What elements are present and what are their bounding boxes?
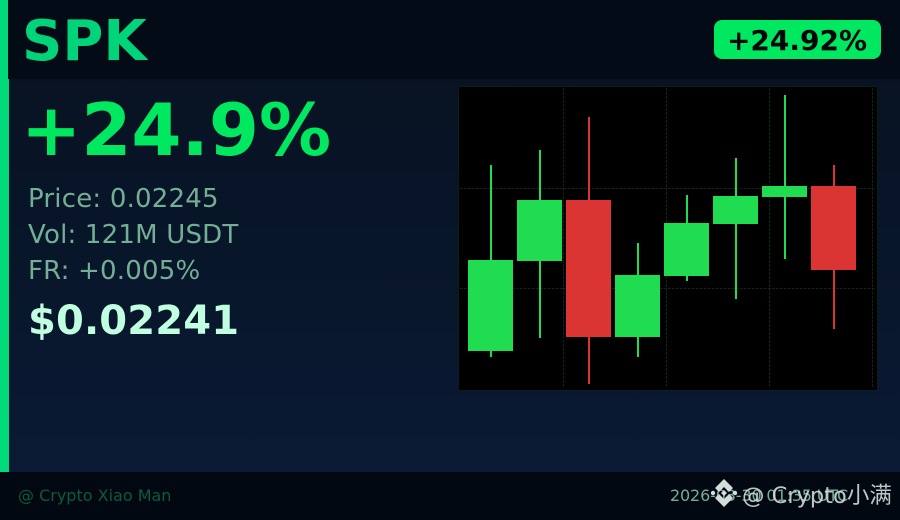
watermark [711,478,892,510]
candle 3 [566,117,611,384]
current price: $0.02241 [28,298,239,344]
left accent bar [0,0,9,472]
candlestick chart [458,86,878,390]
candle 4 [615,243,660,357]
stats block [28,184,238,286]
candle 7 [762,95,807,259]
watermark text: @ Crypto小满 [742,478,892,510]
candle 2 [517,150,562,338]
footer timestamp: 2026-03-30 01:35 UTC [670,486,848,505]
funding rate: FR: +0.005% [28,256,200,286]
volume: Vol: 121M USDT [28,220,238,250]
footer credit: @ Crypto Xiao Man [18,486,171,505]
candle 8 [811,165,856,329]
title: ticker: SPK [22,9,149,74]
change badge: +24.92% [727,24,867,57]
header band [8,0,900,79]
icon: diamond logo [711,479,737,507]
candle 5 [664,195,709,281]
candle 1 [468,165,513,357]
price: Price: 0.02245 [28,184,219,214]
candle 6 [713,158,758,299]
headline change percent: +24.9% [21,88,331,172]
footer band [0,472,900,520]
